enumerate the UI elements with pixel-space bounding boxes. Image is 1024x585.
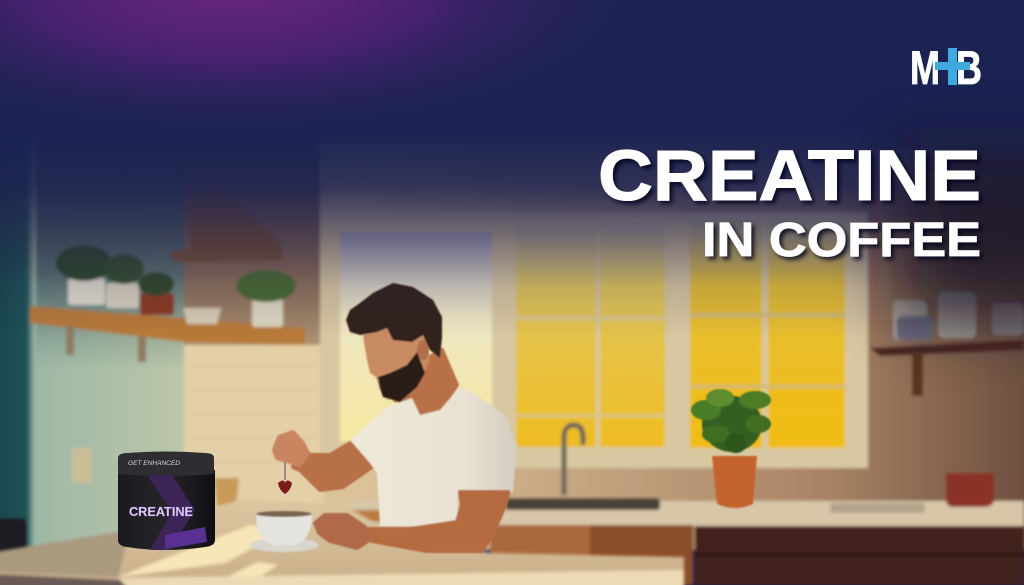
outlet: [72, 448, 92, 483]
back counter: [345, 501, 1024, 526]
plus mark: [935, 48, 970, 85]
left shelf: [30, 306, 305, 345]
purple glow: [0, 0, 800, 200]
title: [598, 137, 981, 267]
product name: CREATINE: [129, 504, 193, 519]
logo: B: [956, 41, 982, 94]
far arm: [293, 442, 372, 490]
window frame: [320, 212, 868, 468]
upper brown wall: [184, 100, 320, 350]
wall tile highlight: [184, 345, 324, 505]
logo: M: [910, 41, 940, 94]
faucet: [564, 425, 583, 495]
right edge shade: [900, 150, 1024, 320]
middle window panes: [516, 224, 665, 447]
teaspoon with heart: [278, 462, 292, 494]
counter edge: [120, 570, 684, 585]
hand holding spoon: [274, 432, 308, 465]
purple arrow graphic: [147, 475, 195, 550]
near arm: [369, 492, 508, 551]
purple swirl: [165, 527, 207, 549]
creatine jar: [118, 452, 215, 550]
right window panes: [690, 220, 845, 448]
man: [274, 283, 517, 551]
wood trim behind man: [345, 510, 385, 522]
title: IN COFFEE: [702, 214, 981, 267]
hair: [346, 283, 442, 358]
beard: [378, 352, 425, 402]
utensil crock: [214, 478, 239, 508]
coffee cup and saucer: [249, 511, 319, 552]
upper teal wall shade: [36, 100, 184, 370]
near hand: [315, 515, 368, 548]
potted plant: [691, 389, 771, 508]
red pot: [946, 473, 994, 507]
range hood: [172, 180, 282, 262]
face: [363, 325, 430, 400]
jar lid: [118, 452, 214, 476]
sink: [505, 498, 660, 510]
left window pane: [340, 232, 492, 442]
teal tiled wall: [0, 100, 184, 550]
cabinets: [490, 525, 1024, 585]
front counter: [0, 500, 684, 585]
shelf plants: [56, 245, 296, 327]
right shelf jars: [893, 292, 1024, 340]
neck: [395, 350, 457, 416]
ear: [417, 340, 429, 360]
right sink: [830, 503, 925, 513]
jar body: [118, 470, 215, 550]
wall: [0, 100, 1024, 550]
title: CREATINE: [598, 137, 981, 216]
right shelf bracket: [912, 352, 923, 396]
shelf brackets: [66, 325, 146, 362]
lid text: GET ENHANCED: [128, 461, 181, 467]
right shelf: [870, 340, 1024, 356]
shaded left of counter: [0, 530, 130, 577]
logo: [910, 41, 982, 94]
dark mug left: [0, 518, 27, 560]
sunlight streaks: [118, 525, 285, 578]
t-shirt: [350, 387, 517, 526]
